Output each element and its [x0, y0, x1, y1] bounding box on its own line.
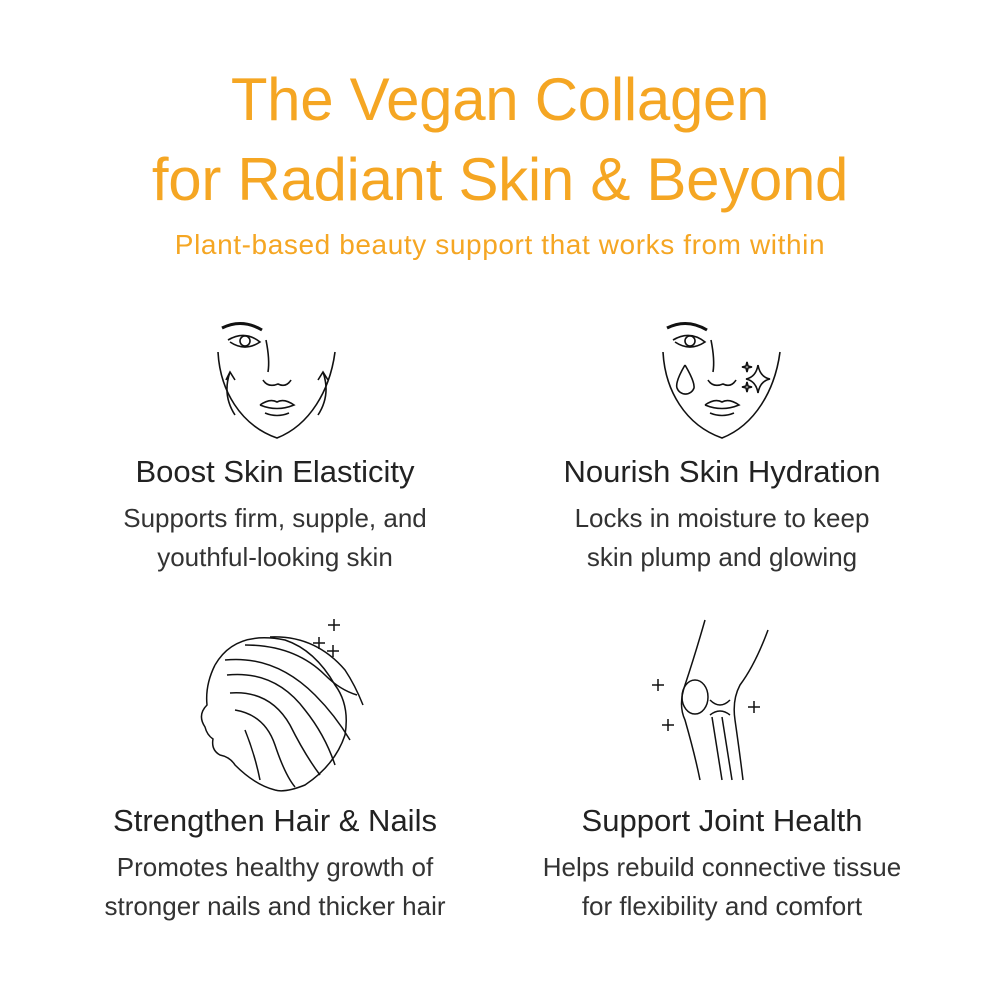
block: hair: stronger nails and thicker hair — [104, 891, 446, 921]
block: hair: Promotes healthy growth of — [117, 852, 433, 882]
block: joint: for flexibility and comfort — [582, 891, 862, 921]
title: for Radiant Skin & Beyond — [152, 146, 848, 213]
icon: knee — [652, 620, 769, 780]
block: elasticity: Supports firm, supple, and — [123, 503, 427, 533]
block: hair — [104, 803, 446, 921]
block: hair: Strengthen Hair & Nails — [113, 803, 437, 838]
block: hydration: Locks in moisture to keep — [575, 503, 869, 533]
block: joint: Helps rebuild connective tissue — [543, 852, 901, 882]
subtitle: Plant-based beauty support that works from within — [175, 229, 825, 260]
block: hydration: Nourish Skin Hydration — [563, 454, 881, 489]
icon: face hydration — [662, 322, 781, 439]
title — [152, 66, 848, 213]
block: hydration — [563, 454, 881, 572]
block: elasticity — [123, 454, 427, 572]
block: joint — [543, 803, 901, 921]
block: elasticity: Boost Skin Elasticity — [135, 454, 415, 489]
icon: hair — [200, 619, 364, 792]
icon: face elasticity — [217, 322, 336, 439]
block: joint: Support Joint Health — [582, 803, 862, 838]
title: The Vegan Collagen — [231, 66, 769, 133]
block: hydration: skin plump and glowing — [587, 542, 857, 572]
block: elasticity: youthful-looking skin — [157, 542, 393, 572]
